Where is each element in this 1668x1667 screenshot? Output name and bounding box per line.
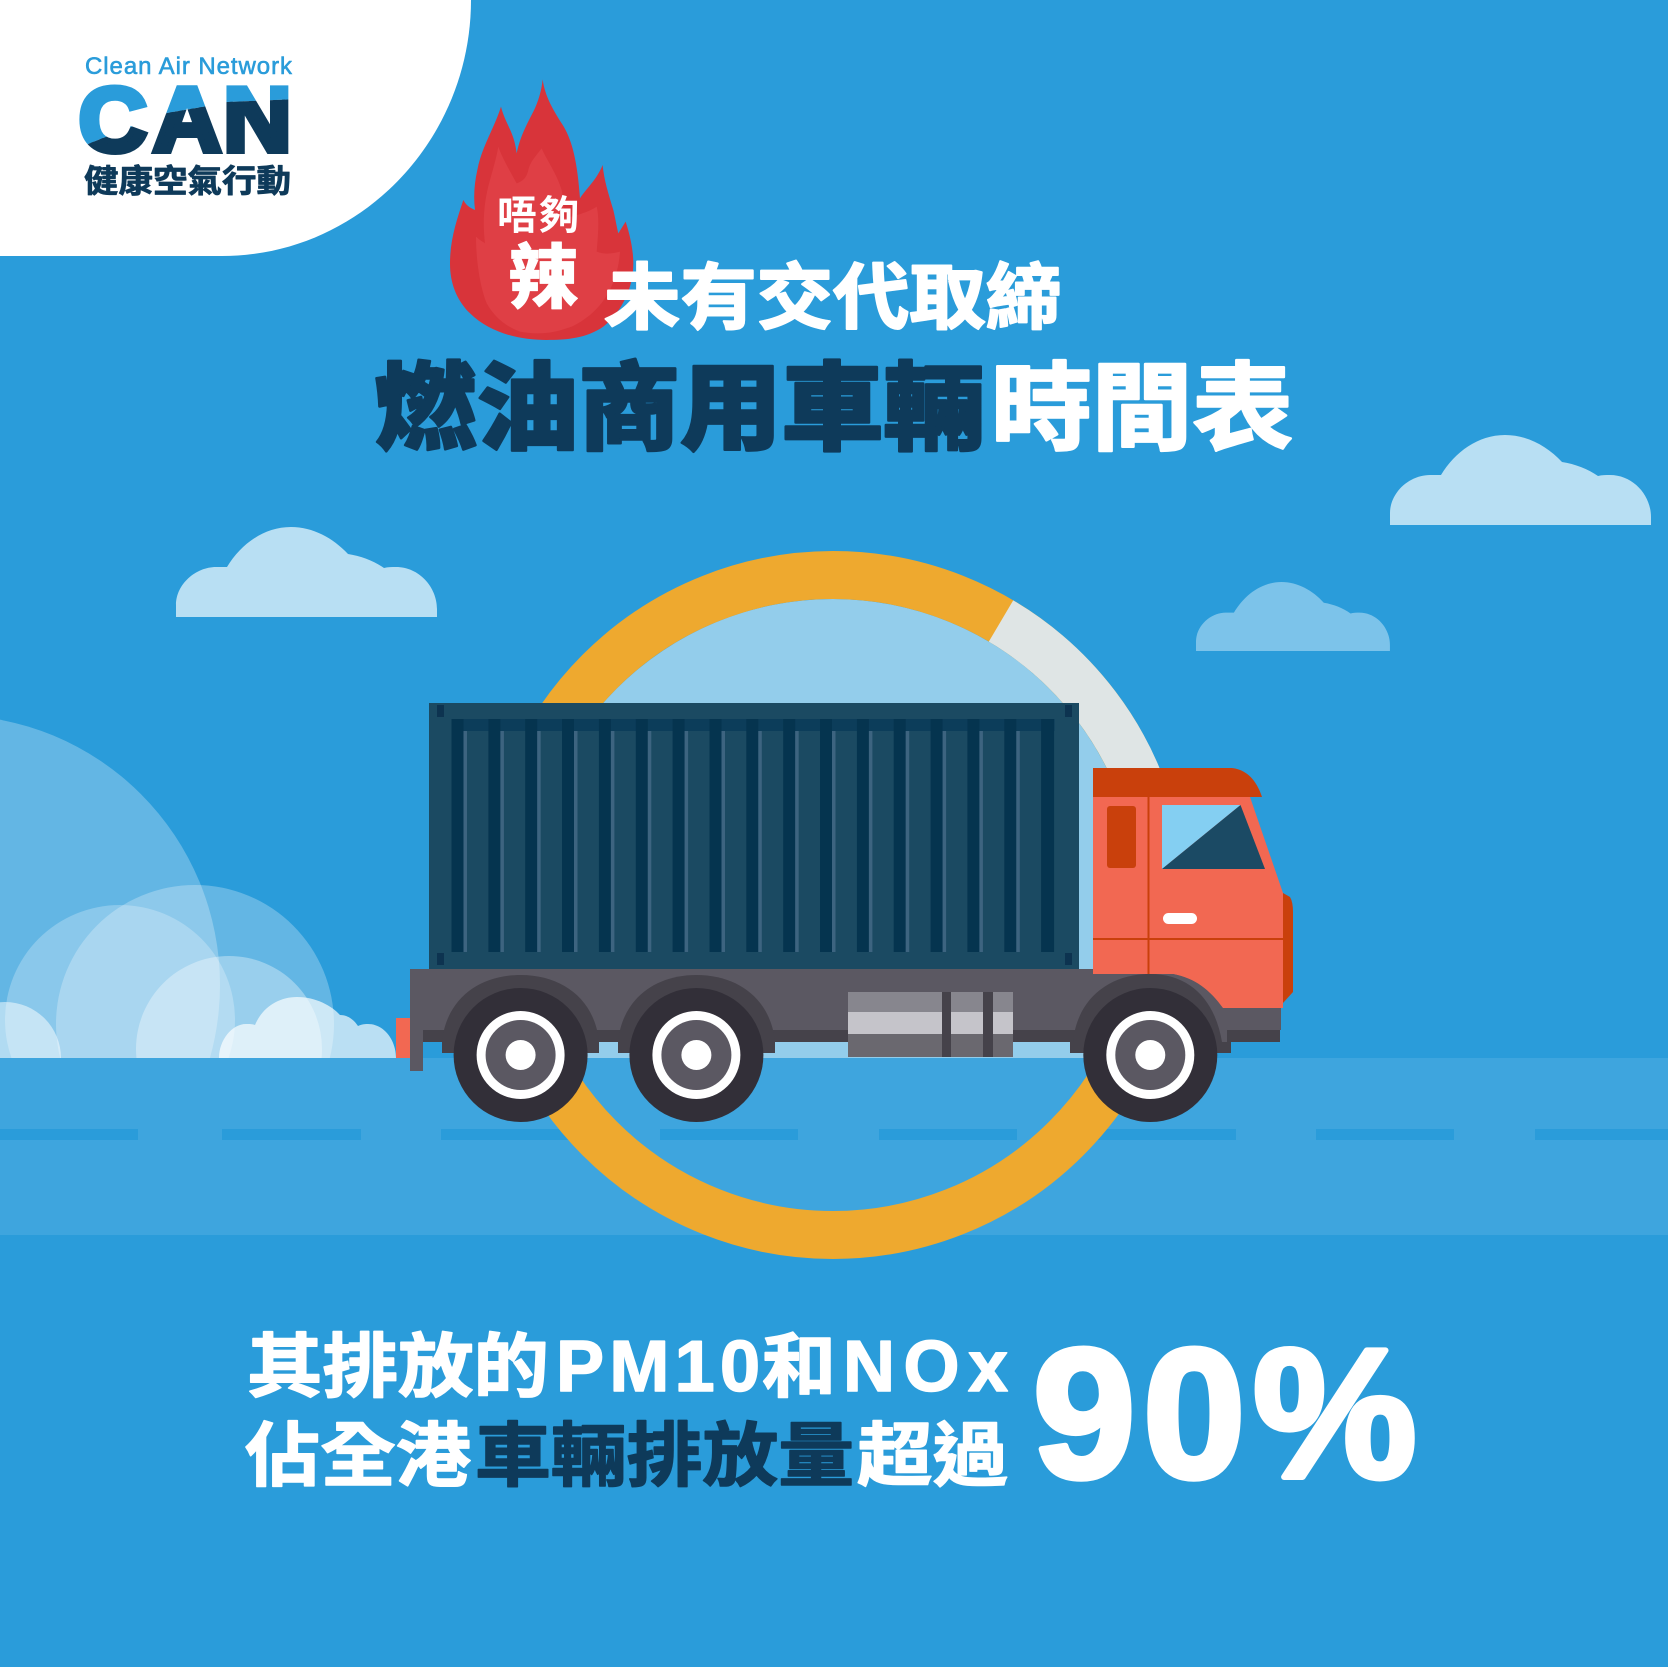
statement line 2: 車輛排放量	[475, 1417, 854, 1495]
logo: Clean Air Network CAN	[79, 53, 293, 199]
tail light	[396, 1018, 410, 1058]
statement line 1: 和	[762, 1328, 836, 1406]
90 percent figure: 90%	[1033, 1310, 1417, 1516]
flame text: 唔夠: 唔夠	[497, 194, 579, 238]
icon: flame	[450, 79, 633, 340]
title line 1: 未有交代取締	[604, 259, 1062, 339]
cloud: top left	[176, 527, 437, 617]
white corner panel	[0, 0, 471, 256]
fuel tank	[848, 992, 1013, 1057]
logo letters CAN: CAN	[79, 69, 292, 171]
statement line 2: 超過	[857, 1417, 1008, 1495]
container	[429, 703, 1079, 969]
statement line 1	[247, 1327, 1008, 1407]
wheel arches	[442, 974, 1231, 1053]
title line 2: 時間表	[991, 356, 1293, 463]
wheel: rear 2	[629, 988, 763, 1122]
logo chinese name: 健康空氣行動	[84, 163, 291, 199]
statement line 2: 佔全港	[245, 1417, 471, 1495]
cab	[1093, 768, 1293, 1008]
disc behind truck	[527, 599, 1139, 1211]
statement line 1: 其排放的	[247, 1328, 549, 1406]
truck	[396, 703, 1293, 1122]
logo letters CAN: CAN	[79, 69, 292, 171]
wheel: rear 1	[454, 988, 588, 1122]
exhaust smoke clouds	[0, 720, 396, 1058]
bottom statement	[245, 1310, 1417, 1516]
statement line 1: PM10	[556, 1327, 760, 1407]
cloud: top right	[1390, 435, 1651, 525]
title line 2	[375, 356, 1293, 463]
logo english name: Clean Air Network	[85, 53, 293, 80]
chassis	[410, 969, 1281, 1071]
title line 2: 燃油商用車輛	[375, 356, 985, 463]
statement line 2	[245, 1417, 1008, 1495]
statement line 1: NOx	[843, 1327, 1008, 1407]
road	[0, 1058, 1668, 1235]
flame text: 辣: 辣	[508, 239, 578, 317]
wheel: front	[1083, 988, 1217, 1122]
logo letters CAN	[79, 84, 288, 155]
donut ring 90 percent	[503, 575, 1163, 1235]
cloud: small right	[1196, 582, 1390, 651]
